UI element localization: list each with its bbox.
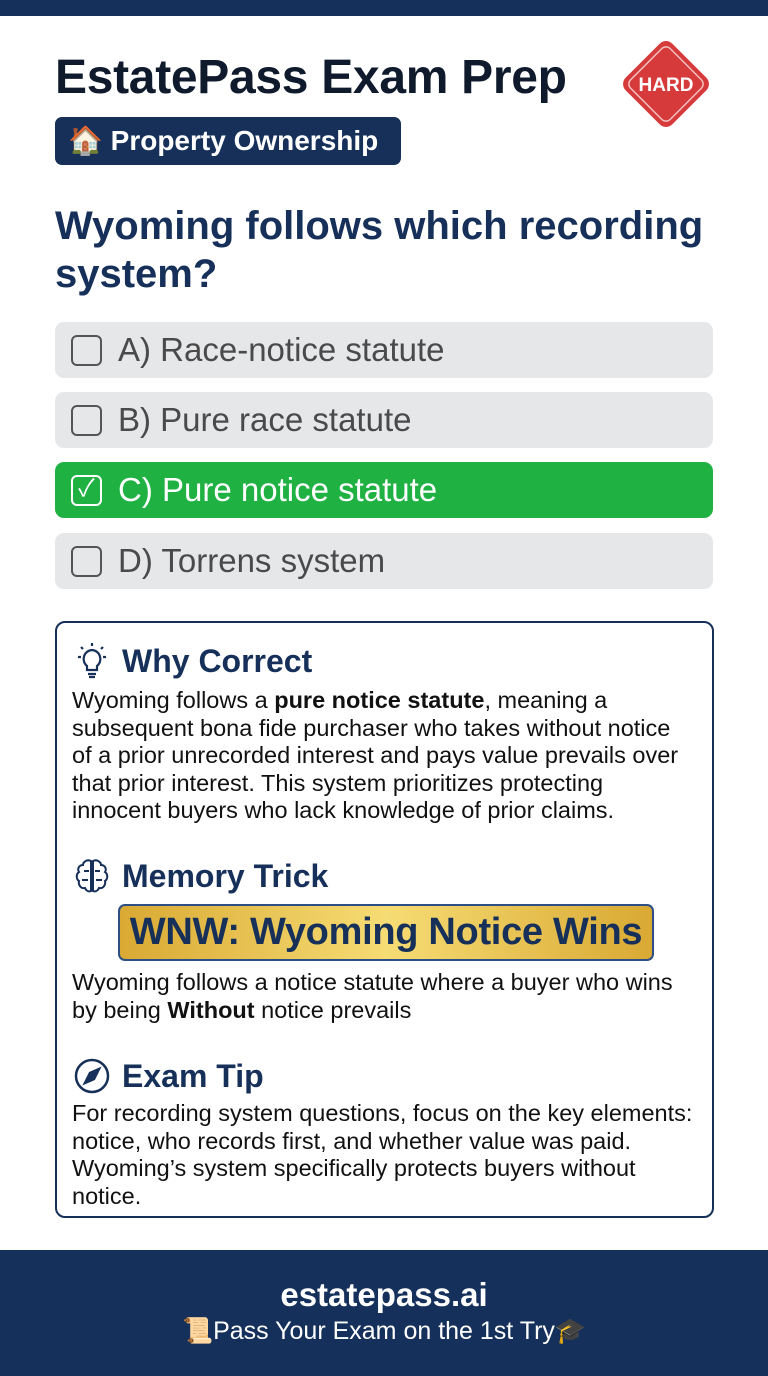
question: Wyoming follows which recording system? (55, 204, 703, 296)
text: memory trick: Wyoming follows a notice statute where a buyer who wins by being Without notice prevails (72, 969, 673, 1022)
difficulty badge: HARD (639, 75, 693, 96)
option B (55, 392, 713, 448)
footer url: estatepass.ai (280, 1276, 488, 1313)
top bar (0, 0, 768, 16)
mnemonic box: WNW: Wyoming Notice Wins (130, 911, 642, 953)
option B: B) Pure race statute (118, 401, 411, 438)
heading: why correct: Why Correct (122, 642, 312, 678)
category badge (55, 117, 401, 165)
text: why correct: Wyoming follows a pure notice statute, meaning a subsequent bona fide purchaser who takes without notice of a prior unrecorded interest and pays value prevails over that prior interest. This system prioritizes protecting innocent buyers who lack knowledge of prior claims. (72, 687, 678, 823)
option C correct: C) Pure notice statute (118, 471, 437, 508)
heading: exam tip: Exam Tip (122, 1058, 264, 1094)
option C correct: ✓ (78, 475, 95, 502)
option D: D) Torrens system (118, 542, 385, 579)
category badge: 🏠 Property Ownership (68, 125, 378, 156)
option C correct (55, 462, 713, 518)
difficulty badge (623, 41, 709, 127)
option D (55, 533, 713, 589)
explanation panel (55, 621, 714, 1218)
title: EstatePass Exam Prep (55, 51, 567, 104)
option A: A) Race-notice statute (118, 331, 444, 368)
footer tagline: 📜Pass Your Exam on the 1st Try🎓 (182, 1317, 586, 1345)
heading: memory trick: Memory Trick (122, 858, 328, 894)
option A (55, 322, 713, 378)
footer (0, 1250, 768, 1376)
text: exam tip: For recording system questions, focus on the key elements: notice, who records first, and whether value was paid. Wyoming’s system specifically protects buyers without notice. (72, 1100, 692, 1208)
